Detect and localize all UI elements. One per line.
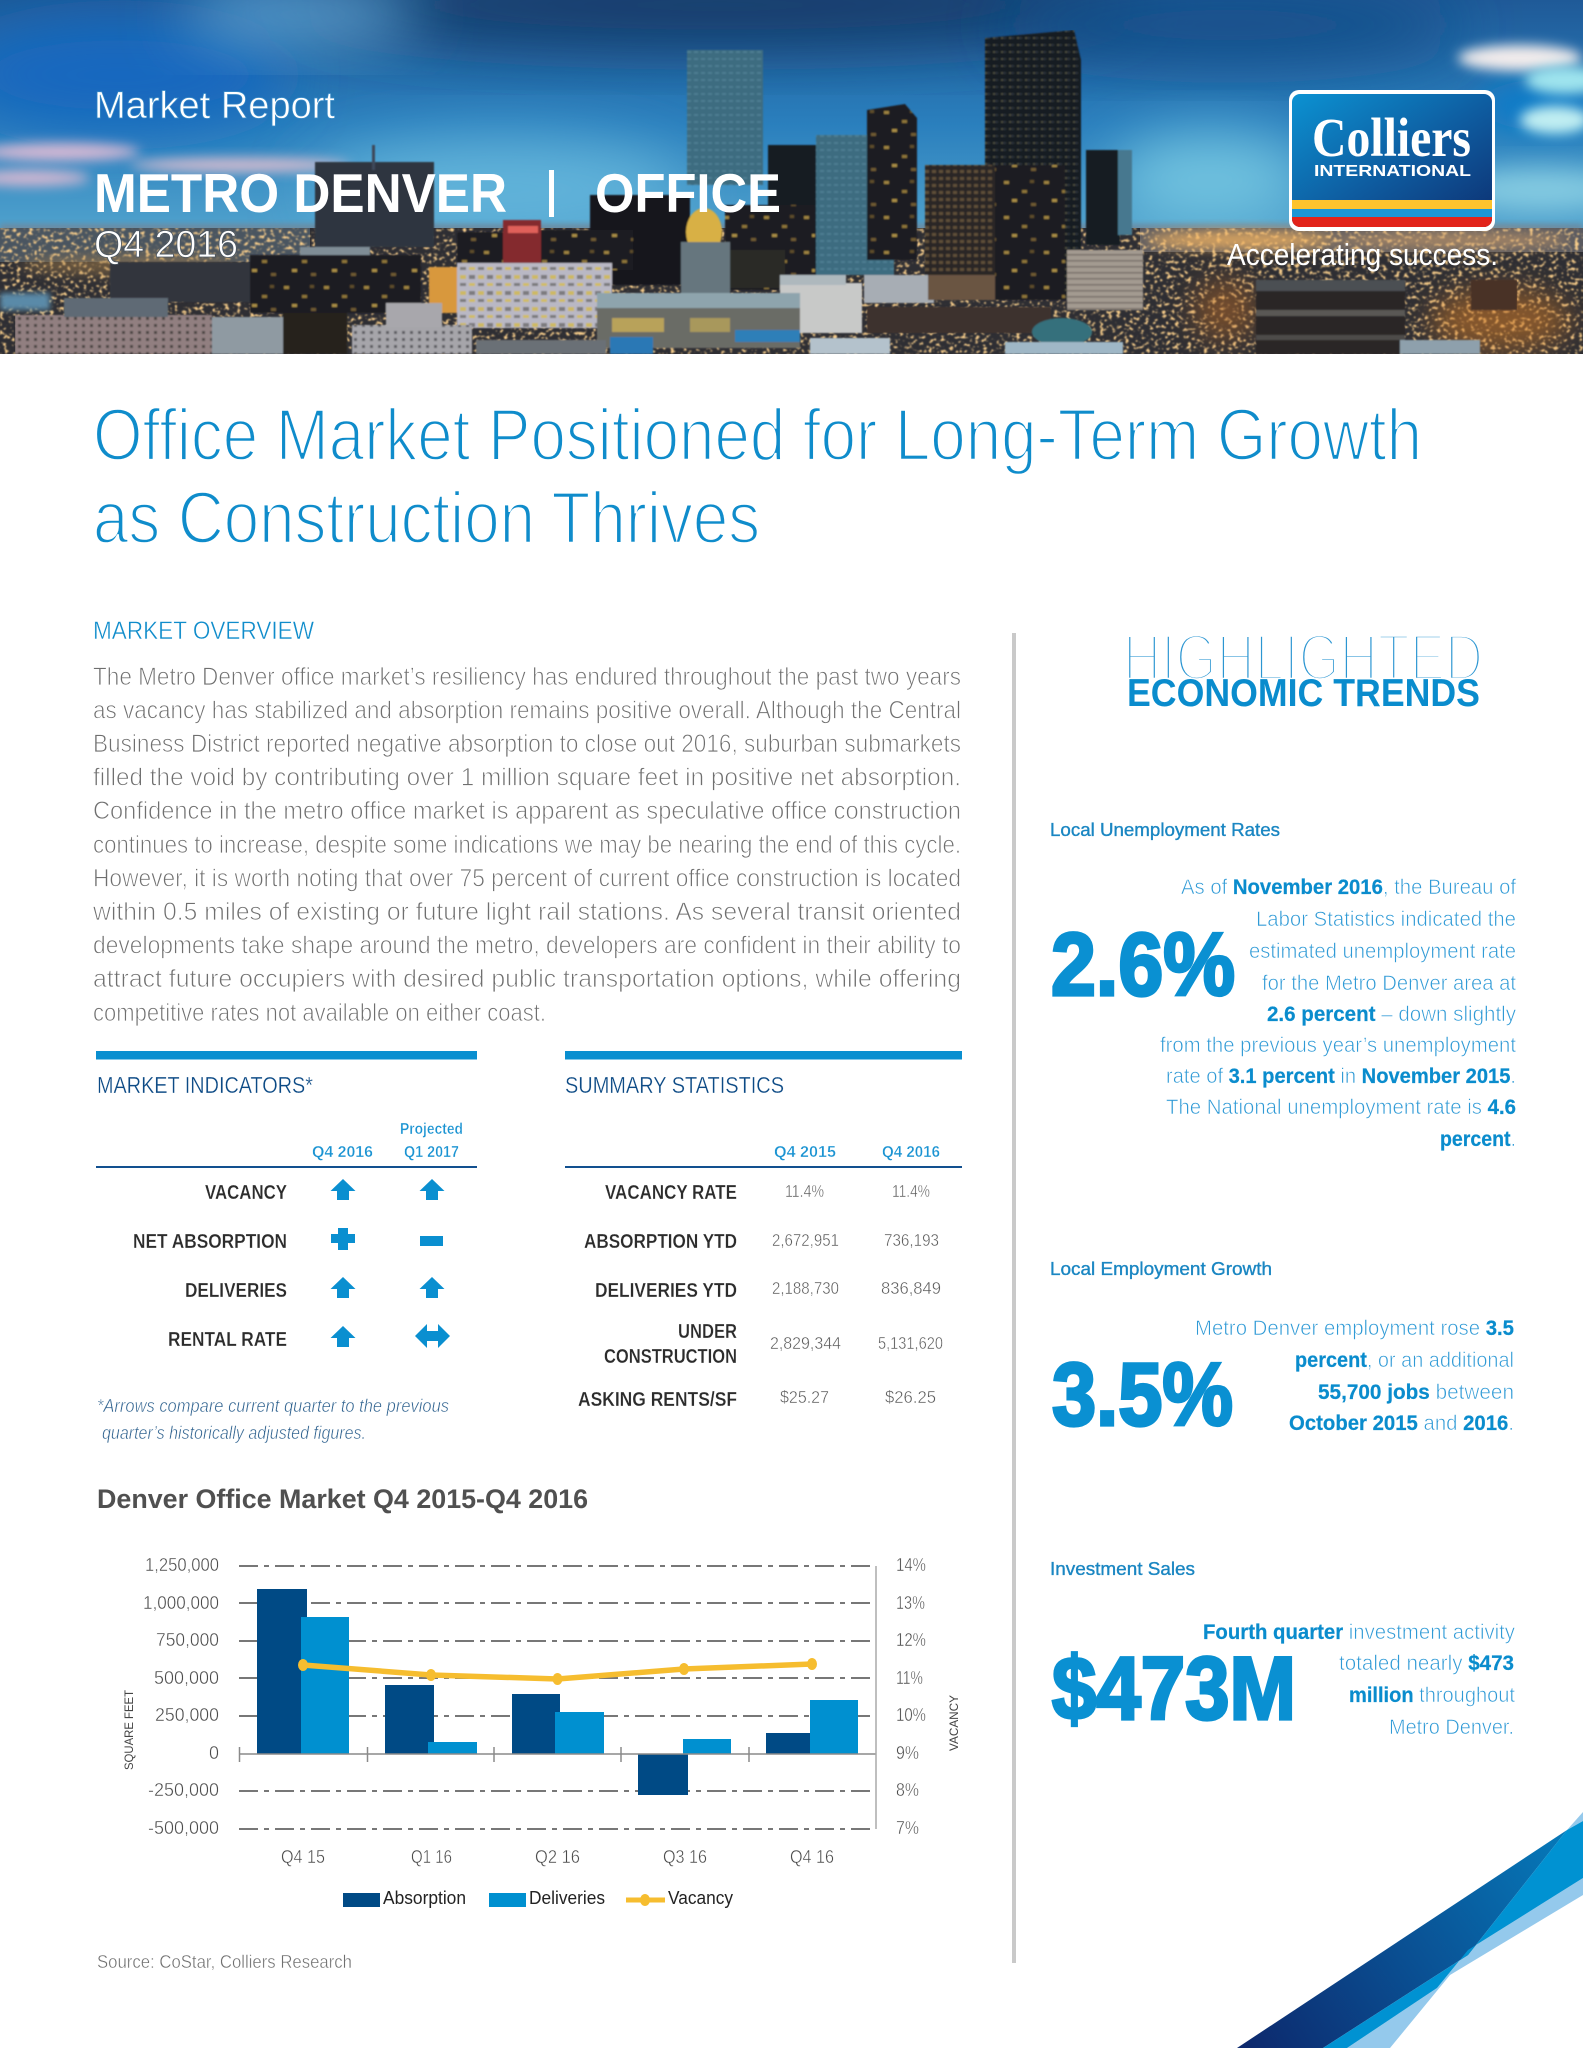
heading: market indicators: MARKET INDICATORS* bbox=[97, 1072, 313, 1098]
sidebar heading bbox=[1123, 620, 1483, 715]
text block: Metro Denver. bbox=[1389, 1716, 1514, 1739]
text block: Labor Statistics indicated the bbox=[1256, 908, 1516, 931]
table values: 11.4% bbox=[892, 1181, 930, 1201]
left axis labels: 1,250,000 bbox=[145, 1555, 219, 1575]
column headers: Q1 2017 bbox=[404, 1144, 459, 1161]
city base bbox=[0, 221, 1583, 228]
logo: Colliers International: Colliers bbox=[1312, 107, 1471, 168]
text block: market overview body: as vacancy has stabilized and absorption remains positive overall. Although the Central bbox=[93, 696, 961, 724]
text block: estimated unemployment rate bbox=[1249, 940, 1516, 963]
category labels: Q4 15 bbox=[281, 1847, 325, 1867]
table values: 2,829,344 bbox=[770, 1333, 841, 1353]
text: Market Report: Market Report bbox=[94, 85, 335, 127]
heading: summary statistics: SUMMARY STATISTICS bbox=[565, 1072, 784, 1098]
line: vacancy bbox=[298, 1658, 817, 1685]
text block: The National unemployment rate is 4.6 bbox=[1166, 1096, 1516, 1119]
text block: for the Metro Denver area at bbox=[1262, 972, 1516, 995]
skyline photo illustration bbox=[0, 0, 1583, 354]
row labels bbox=[133, 1182, 288, 1351]
sidebar heading: HIGHLIGHTED bbox=[1123, 620, 1483, 694]
category labels: Q1 16 bbox=[411, 1847, 452, 1867]
page title: as Construction Thrives bbox=[93, 478, 760, 559]
panel: unemployment bbox=[1050, 820, 1516, 1151]
column headers: Q4 2016 bbox=[312, 1144, 373, 1161]
column divider bbox=[1012, 633, 1016, 1963]
axis title: square feet: SQUARE FEET bbox=[124, 1690, 136, 1770]
right axis labels: 11% bbox=[896, 1668, 923, 1688]
panel: investment sales bbox=[1050, 1559, 1515, 1739]
left axis labels: -500,000 bbox=[148, 1818, 219, 1838]
right axis labels bbox=[896, 1555, 926, 1838]
logo: Colliers International bbox=[1289, 90, 1495, 231]
logo: Colliers International: INTERNATIONAL bbox=[1314, 163, 1471, 180]
capitol dome bbox=[686, 208, 722, 256]
row labels: NET ABSORPTION bbox=[133, 1231, 287, 1253]
category labels: Q4 16 bbox=[790, 1847, 834, 1867]
left axis labels: -250,000 bbox=[148, 1780, 219, 1800]
left axis labels: 1,000,000 bbox=[143, 1593, 219, 1613]
text block: million throughout bbox=[1349, 1684, 1515, 1707]
legend bbox=[343, 1888, 733, 1908]
heading: Investment Sales bbox=[1050, 1559, 1195, 1579]
legend: Deliveries bbox=[529, 1888, 605, 1908]
text block: percent, or an additional bbox=[1295, 1349, 1514, 1372]
text block: market overview body: The Metro Denver office market’s resiliency has endured throughout the past two years bbox=[93, 663, 961, 691]
row labels: ASKING RENTS/SF bbox=[578, 1389, 737, 1411]
panel: summary statistics bbox=[565, 1051, 962, 1411]
right axis labels: 7% bbox=[896, 1818, 919, 1838]
table values bbox=[770, 1181, 943, 1407]
text block: As of November 2016, the Bureau of bbox=[1181, 876, 1516, 899]
left axis labels bbox=[143, 1555, 219, 1838]
right axis labels: 14% bbox=[896, 1555, 926, 1575]
big number: 3.5% bbox=[1052, 1344, 1233, 1444]
chart: absorption, deliveries and vacancy bbox=[124, 1555, 961, 1908]
text block: market overview body: Business District reported negative absorption to close out 2016, suburban submarkets bbox=[93, 730, 961, 758]
heading: Local Unemployment Rates bbox=[1050, 820, 1280, 840]
right axis labels: 9% bbox=[896, 1743, 919, 1763]
right axis labels: 13% bbox=[896, 1593, 925, 1613]
table values: $25.27 bbox=[780, 1387, 829, 1407]
page title bbox=[93, 395, 1422, 559]
footnote: *Arrows compare current quarter to the previous bbox=[97, 1396, 449, 1416]
lower buildings bbox=[250, 255, 421, 313]
right axis labels: 8% bbox=[896, 1780, 919, 1800]
page title: Office Market Positioned for Long-Term Growth bbox=[93, 395, 1422, 476]
table values: 836,849 bbox=[881, 1278, 941, 1298]
footnote bbox=[97, 1396, 449, 1443]
text block: rate of 3.1 percent in November 2015. bbox=[1166, 1065, 1516, 1088]
row labels: ABSORPTION YTD bbox=[584, 1231, 737, 1253]
chart heading: Denver Office Market Q4 2015-Q4 2016 bbox=[97, 1484, 588, 1514]
big number: 2.6% bbox=[1051, 914, 1235, 1014]
right axis labels: 12% bbox=[896, 1630, 926, 1650]
legend: Absorption bbox=[383, 1888, 466, 1908]
text block: percent. bbox=[1440, 1128, 1516, 1151]
text block: Metro Denver employment rose 3.5 bbox=[1195, 1317, 1514, 1340]
text: quarter: Q4 2016 bbox=[94, 224, 238, 266]
panel: header banner bbox=[0, 0, 1583, 354]
bars: deliveries bbox=[301, 1617, 858, 1754]
text block bbox=[1160, 876, 1516, 1151]
column headers: Projected bbox=[400, 1121, 463, 1138]
row labels: VACANCY RATE bbox=[605, 1182, 737, 1204]
column headers bbox=[774, 1144, 940, 1161]
text block: market overview body: continues to increase, despite some indications we may be nearing the end of this cycle. bbox=[93, 831, 961, 859]
text block bbox=[1203, 1621, 1515, 1739]
axis title: vacancy: VACANCY bbox=[949, 1695, 961, 1751]
row labels: DELIVERIES bbox=[185, 1280, 287, 1302]
heading: Office: OFFICE bbox=[595, 162, 781, 224]
corner graphic: diagonal blue bands bbox=[1237, 1812, 1583, 2048]
heading: Local Employment Growth bbox=[1050, 1259, 1272, 1279]
legend: Vacancy bbox=[668, 1888, 733, 1908]
left axis labels: 500,000 bbox=[154, 1668, 219, 1688]
row labels: DELIVERIES YTD bbox=[595, 1280, 737, 1302]
towers bbox=[15, 30, 1517, 354]
row labels bbox=[578, 1182, 737, 1411]
category labels: Q3 16 bbox=[663, 1847, 707, 1867]
table values: 11.4% bbox=[785, 1181, 824, 1201]
icons: indicator arrows bbox=[330, 1179, 450, 1348]
left axis labels: 750,000 bbox=[156, 1630, 219, 1650]
bars: absorption bbox=[257, 1589, 810, 1795]
right axis labels: 10% bbox=[896, 1705, 926, 1725]
text block: market overview body: within 0.5 miles of existing or future light rail stations. As several transit oriented bbox=[92, 898, 961, 926]
footnote: quarter’s historically adjusted figures. bbox=[102, 1423, 366, 1443]
text block: totaled nearly $473 bbox=[1339, 1652, 1514, 1675]
text block: market overview body: However, it is worth noting that over 75 percent of current office construction is located bbox=[93, 864, 961, 892]
row labels: UNDER bbox=[678, 1321, 737, 1343]
row labels: VACANCY bbox=[205, 1182, 288, 1204]
column headers: Q4 2016 bbox=[882, 1144, 940, 1161]
sidebar heading: ECONOMIC TRENDS bbox=[1127, 672, 1480, 715]
category labels bbox=[281, 1847, 834, 1867]
row labels: CONSTRUCTION bbox=[604, 1346, 737, 1368]
table values: 5,131,620 bbox=[878, 1333, 943, 1353]
text block bbox=[1195, 1317, 1514, 1435]
tagline: Accelerating success. bbox=[1227, 237, 1498, 272]
heading: market overview: MARKET OVERVIEW bbox=[93, 617, 314, 645]
panel: employment growth bbox=[1050, 1259, 1514, 1444]
left axis labels: 250,000 bbox=[155, 1705, 219, 1725]
category labels: Q2 16 bbox=[535, 1847, 580, 1867]
source note: Source: CoStar, Colliers Research bbox=[97, 1952, 352, 1972]
text block: market overview body: competitive rates not available on either coast. bbox=[93, 999, 546, 1027]
column headers bbox=[312, 1121, 463, 1161]
text block: market overview body bbox=[92, 663, 961, 1027]
text block: market overview body: developments take shape around the metro, developers are confident in their ability to bbox=[93, 932, 961, 960]
table values: 2,188,730 bbox=[772, 1278, 839, 1298]
divider bar bbox=[549, 170, 554, 217]
text block: Fourth quarter investment activity bbox=[1203, 1621, 1515, 1644]
text block: 2.6 percent – down slightly bbox=[1267, 1003, 1516, 1026]
text block: market overview body: filled the void by contributing over 1 million square feet in positive net absorption. bbox=[93, 764, 961, 792]
text block: market overview body: attract future occupiers with desired public transportation options, while offering bbox=[93, 965, 961, 993]
big number: $473M bbox=[1052, 1638, 1296, 1738]
column headers: Q4 2015 bbox=[774, 1144, 836, 1161]
text block: from the previous year’s unemployment bbox=[1160, 1034, 1516, 1057]
left axis labels: 0 bbox=[209, 1743, 219, 1763]
text block: market overview body: Confidence in the metro office market is apparent as speculative office construction bbox=[93, 797, 961, 825]
text block: 55,700 jobs between bbox=[1318, 1381, 1514, 1404]
row labels: RENTAL RATE bbox=[168, 1329, 287, 1351]
panel: market indicators bbox=[96, 1051, 477, 1443]
text block: October 2015 and 2016. bbox=[1289, 1412, 1514, 1435]
heading: Metro Denver: METRO DENVER bbox=[94, 162, 507, 224]
table values: $26.25 bbox=[885, 1387, 936, 1407]
table values: 2,672,951 bbox=[772, 1230, 839, 1250]
table values: 736,193 bbox=[884, 1230, 939, 1250]
